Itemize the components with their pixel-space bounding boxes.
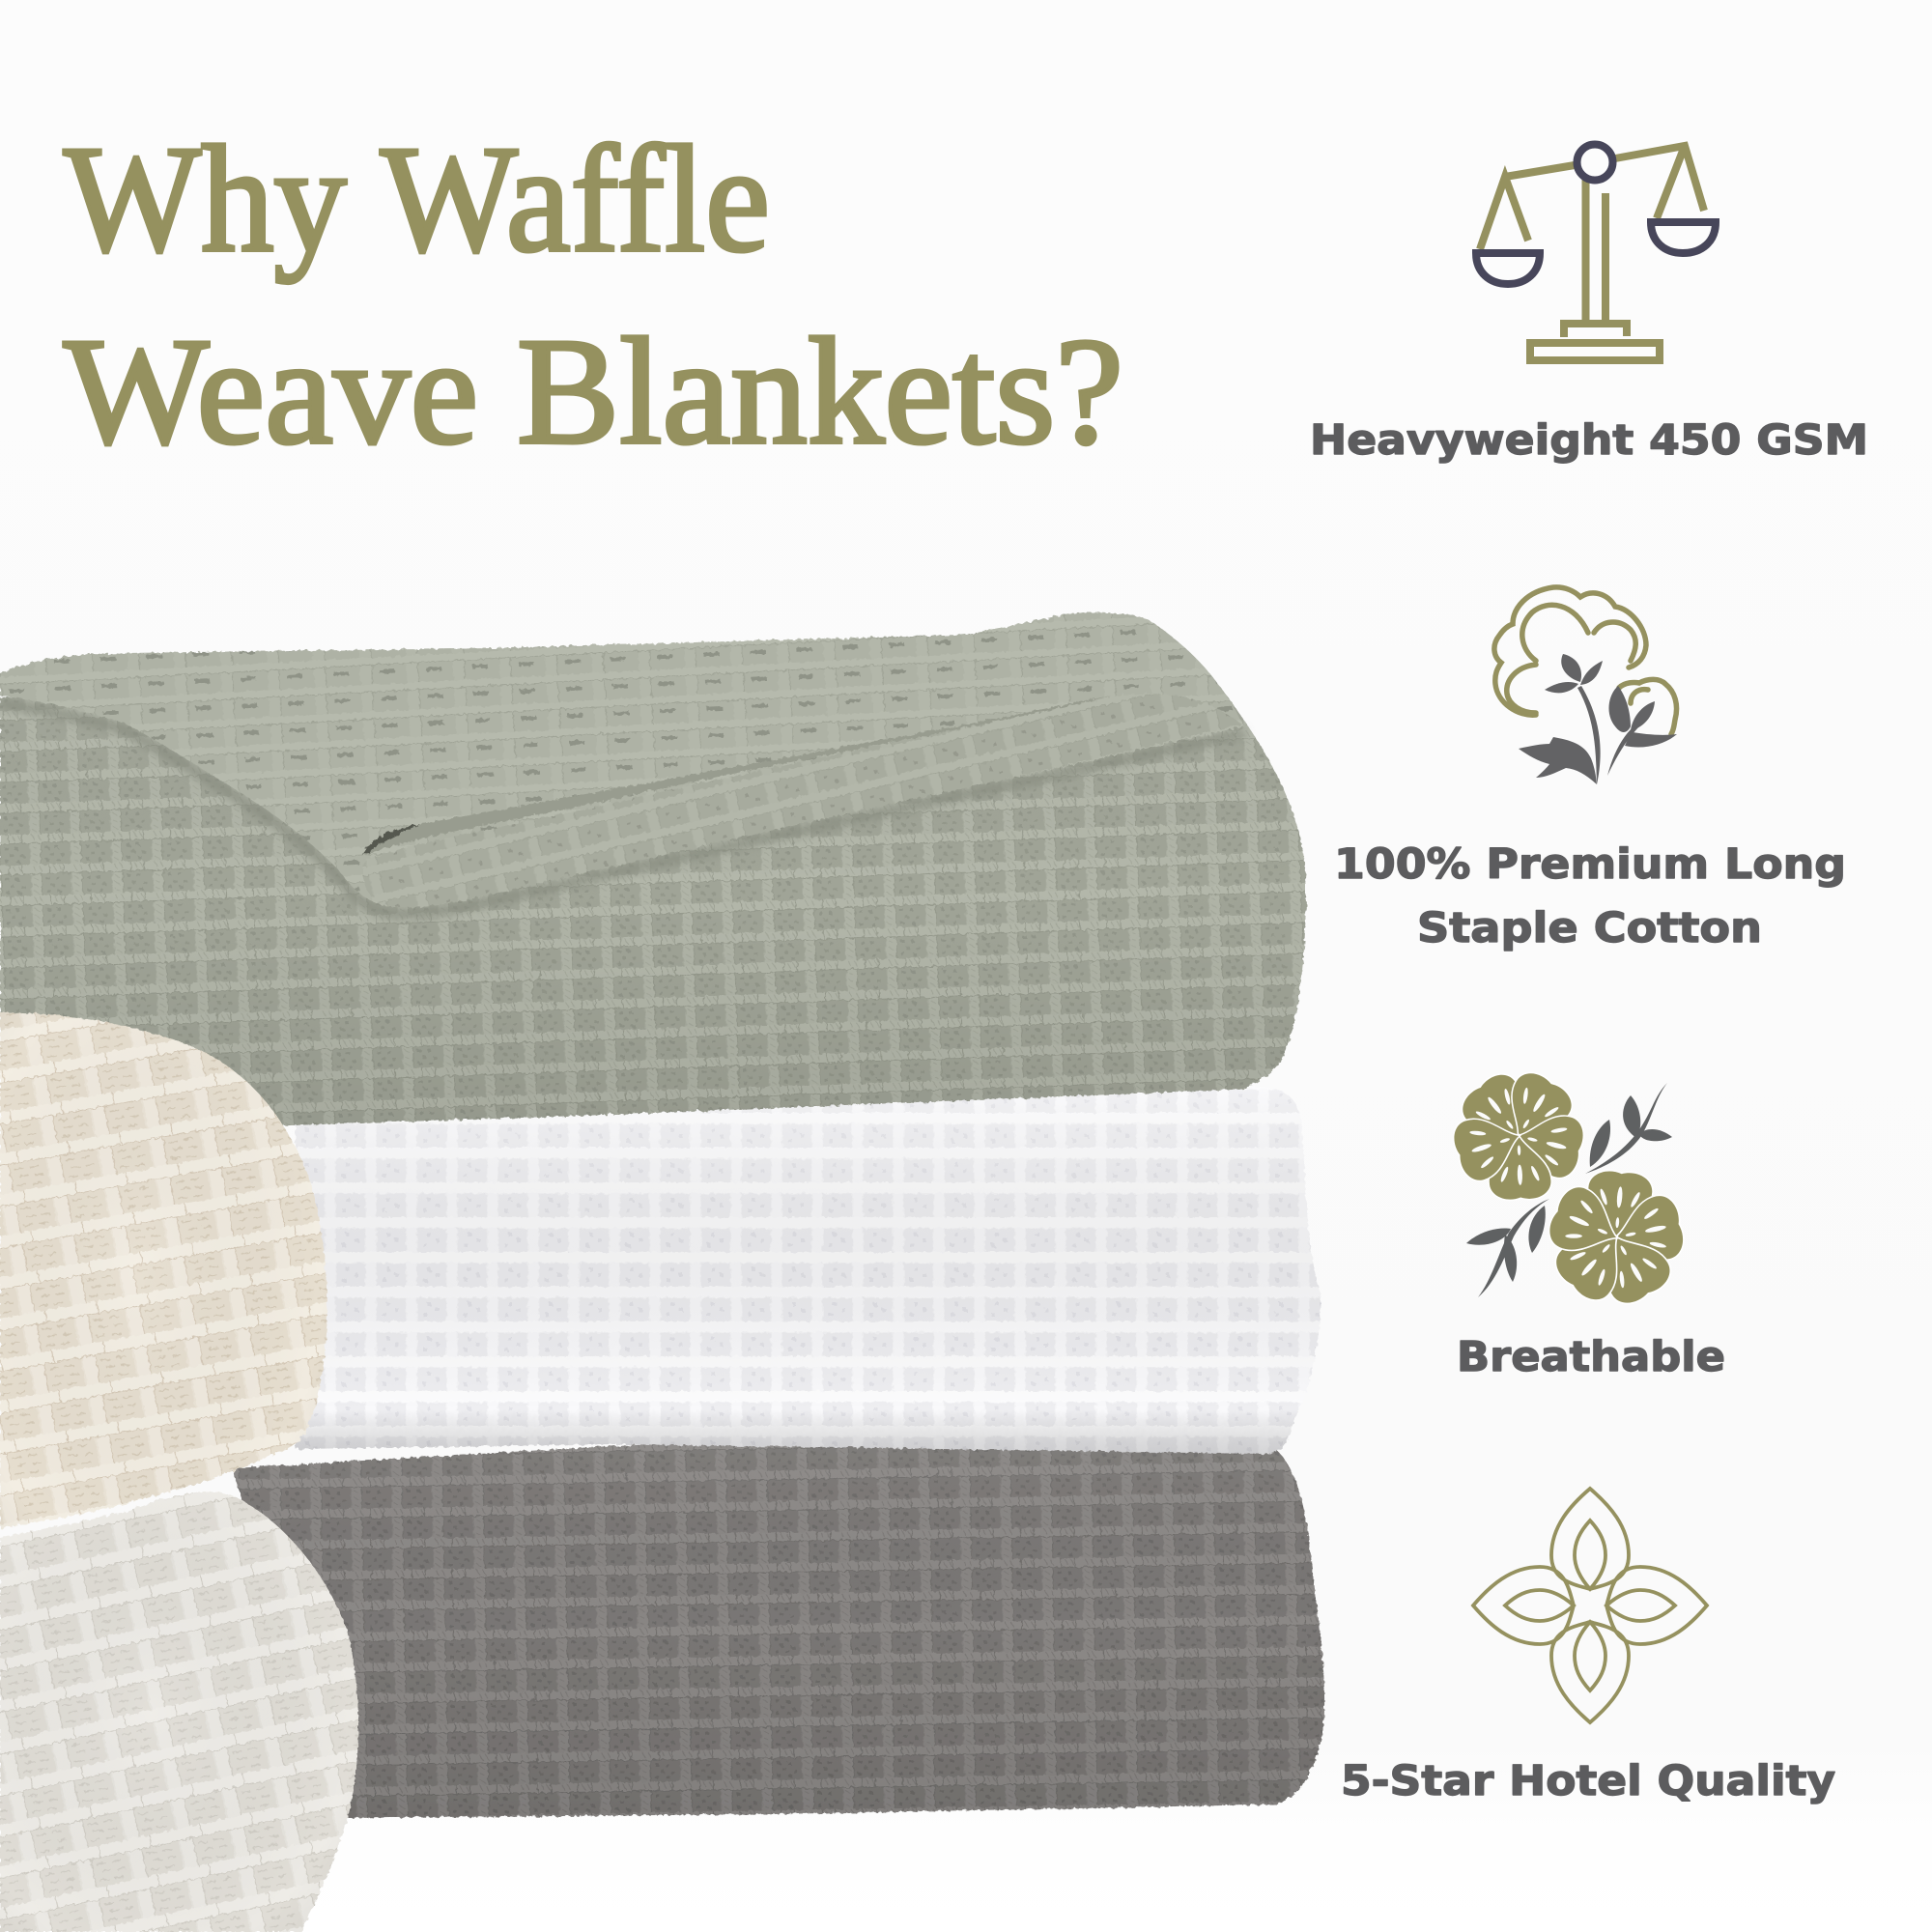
label: 100% premium long staple cotton bbox=[1334, 840, 1846, 952]
label: 100% premium long staple cotton: 100% Premium Long bbox=[1334, 840, 1846, 889]
icon: balance scale bbox=[1476, 145, 1716, 360]
blanket: oatmeal roll bbox=[0, 1492, 358, 1932]
blanket: cream roll bbox=[0, 1012, 327, 1528]
sprig two bbox=[1466, 1199, 1549, 1297]
flower one bbox=[1449, 1066, 1587, 1200]
feature: heavyweight bbox=[1310, 145, 1868, 465]
label: 100% premium long staple cotton: Staple Cotton bbox=[1417, 904, 1762, 952]
blanket: white folded bbox=[296, 1087, 1321, 1454]
icon: cotton plant bbox=[1494, 587, 1677, 784]
icon: flowers and sprigs bbox=[1449, 1066, 1687, 1310]
label: heavyweight 450 GSM: Heavyweight 450 GSM bbox=[1310, 416, 1868, 465]
blanket: sage top flap with crease bbox=[0, 612, 1244, 914]
label: 5-star hotel quality: 5-Star Hotel Quality bbox=[1341, 1757, 1835, 1805]
flower two bbox=[1544, 1170, 1687, 1310]
icon: four-petal ornament bbox=[1473, 1489, 1707, 1722]
feature: long staple cotton bbox=[1334, 587, 1846, 952]
feature: breathable bbox=[1449, 1066, 1725, 1381]
flap lower lip bbox=[363, 694, 1244, 907]
flap shadow bbox=[0, 703, 1244, 914]
crease bbox=[362, 696, 1111, 856]
blanket: dark grey folded bbox=[232, 1437, 1324, 1818]
title bbox=[64, 115, 1123, 476]
photo: stack of folded waffle blankets bbox=[0, 612, 1324, 1932]
label: breathable: Breathable bbox=[1457, 1333, 1725, 1381]
title: Why Waffle bbox=[64, 115, 770, 284]
feature: hotel quality bbox=[1341, 1489, 1835, 1805]
title: Weave Blankets? bbox=[64, 307, 1123, 476]
sprig one bbox=[1585, 1083, 1672, 1174]
blanket: sage folded body bbox=[0, 650, 1306, 1125]
